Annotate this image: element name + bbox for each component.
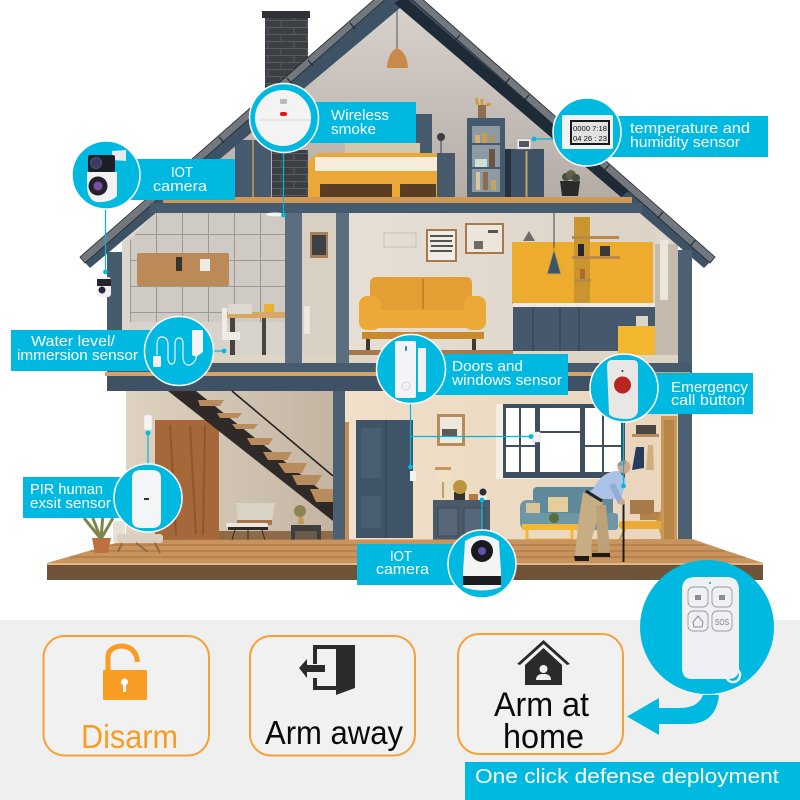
arrow from remote to cards	[627, 695, 719, 735]
card: Arm at home	[458, 634, 623, 756]
callout: PIR sensor	[23, 464, 182, 532]
floor beam	[105, 363, 692, 391]
callout: temperature and humidity sensor: humidity sensor	[630, 135, 740, 151]
staircase	[168, 391, 333, 521]
coffee table	[522, 513, 582, 551]
wooden deck	[47, 539, 763, 580]
main room wall	[349, 213, 655, 358]
banner: one click defense deployment: One click defense deployment	[475, 766, 779, 788]
side doorway	[661, 416, 677, 552]
icon: SOS button	[607, 360, 638, 419]
mini temperature sensor	[517, 139, 531, 149]
nightstand and lamp	[437, 133, 455, 197]
callout: IOT camera (upper): IOT	[171, 165, 193, 181]
hallway panel	[302, 213, 336, 363]
window	[496, 404, 625, 479]
banner: one click defense deployment	[465, 762, 800, 800]
attic room	[163, 4, 622, 197]
cream lounge chair	[113, 521, 163, 553]
card: Arm away: Arm away	[265, 714, 403, 751]
callout: IOT camera (lower)	[357, 530, 516, 598]
icon: open padlock	[103, 646, 147, 700]
mini window sensor	[533, 432, 540, 442]
icon: dome camera	[463, 536, 501, 590]
callout: temperature and humidity sensor	[553, 98, 768, 166]
callout: emergency call button: call button	[671, 393, 745, 409]
attic floor beam	[150, 197, 642, 213]
callout: PIR sensor: exsit sensor	[30, 496, 111, 512]
ground floor right room	[333, 391, 678, 553]
coat rack	[632, 425, 659, 470]
callout: temperature and humidity sensor: temperature and	[630, 121, 750, 137]
pendant lamp	[387, 5, 408, 68]
attic plant	[560, 170, 580, 196]
callout: IOT camera (lower): IOT	[390, 549, 412, 565]
pendant triangle lamp	[547, 213, 561, 274]
attic wardrobe	[235, 140, 271, 197]
callout: emergency call button	[590, 354, 753, 422]
bed	[308, 114, 443, 197]
ground floor left room	[126, 391, 333, 549]
icon: contact sensor	[395, 341, 426, 398]
callout: PIR sensor: PIR human	[30, 482, 103, 498]
elderly man	[574, 460, 630, 562]
upper floor rooms	[122, 213, 678, 363]
connector lines	[104, 137, 625, 532]
side nook	[655, 240, 678, 360]
callout: wireless smoke: smoke	[331, 122, 376, 138]
callout: wireless smoke	[250, 84, 416, 152]
shelves	[572, 217, 620, 304]
house illustration	[47, 0, 763, 580]
wall shelf	[137, 253, 229, 286]
potted plant	[84, 514, 113, 553]
walls and columns	[107, 213, 692, 553]
wooden lounge chair	[614, 490, 672, 552]
callout: water level sensor: Water level/	[31, 334, 116, 350]
framed picture	[437, 414, 465, 446]
small wall lamp	[523, 231, 535, 241]
navy door	[356, 420, 413, 538]
icon: dual-lens camera	[87, 150, 126, 202]
callout: water level sensor: immersion sensor	[17, 348, 138, 364]
mini device: door sensor	[410, 471, 416, 481]
mini device: PIR sensor	[144, 415, 152, 430]
console cabinet with lamp	[433, 467, 490, 543]
kitchen tile wall	[130, 213, 285, 350]
icon: home with person	[517, 640, 570, 685]
callout: wireless smoke: Wireless	[331, 108, 389, 124]
callout: doors and windows sensor: windows sensor	[451, 373, 562, 389]
remote control callout	[640, 560, 774, 694]
callout: IOT camera (upper): camera	[153, 179, 208, 195]
accent chair	[226, 503, 275, 546]
icon: LCD thermometer: 0000 7:18	[573, 124, 607, 133]
cabinet	[505, 149, 544, 197]
wall pictures	[384, 223, 504, 262]
bottom panel background	[0, 620, 800, 800]
dining table	[222, 304, 300, 358]
mini device: ceiling smoke alarm	[266, 212, 284, 216]
sofa	[359, 277, 486, 355]
icon: smoke detector	[255, 90, 311, 146]
kitchen cabinets	[513, 303, 667, 360]
icon: LCD thermometer: 04 26 : 23	[573, 134, 607, 143]
roof	[80, 0, 715, 268]
mini device: camera	[97, 277, 111, 297]
chimney	[262, 11, 310, 108]
card: Arm at home: home	[503, 718, 584, 756]
callout: doors and windows sensor: Doors and	[452, 359, 523, 375]
card: Arm at home: Arm at	[494, 686, 590, 724]
callout: IOT camera (lower): camera	[376, 562, 430, 578]
side table with plant	[291, 505, 321, 549]
icon: LCD thermometer	[562, 115, 613, 149]
callout: IOT camera (upper)	[72, 141, 235, 209]
callout: doors and windows sensor	[376, 334, 568, 404]
icon: key fob remote: SOS	[715, 617, 729, 627]
card: Disarm	[44, 636, 209, 756]
yellow wall panel	[512, 242, 653, 304]
wooden door	[155, 420, 219, 540]
icon: exit door	[299, 645, 355, 695]
callout: water level sensor	[11, 316, 214, 386]
callout: emergency call button: Emergency	[671, 380, 749, 396]
floor strip	[125, 355, 678, 363]
card: Arm away	[250, 636, 415, 756]
card: Disarm: Disarm	[81, 718, 178, 755]
teal sofa	[520, 487, 618, 530]
bookcase	[467, 98, 505, 197]
icon: water sensor with cable	[153, 330, 203, 367]
icon: PIR motion sensor	[132, 470, 161, 528]
